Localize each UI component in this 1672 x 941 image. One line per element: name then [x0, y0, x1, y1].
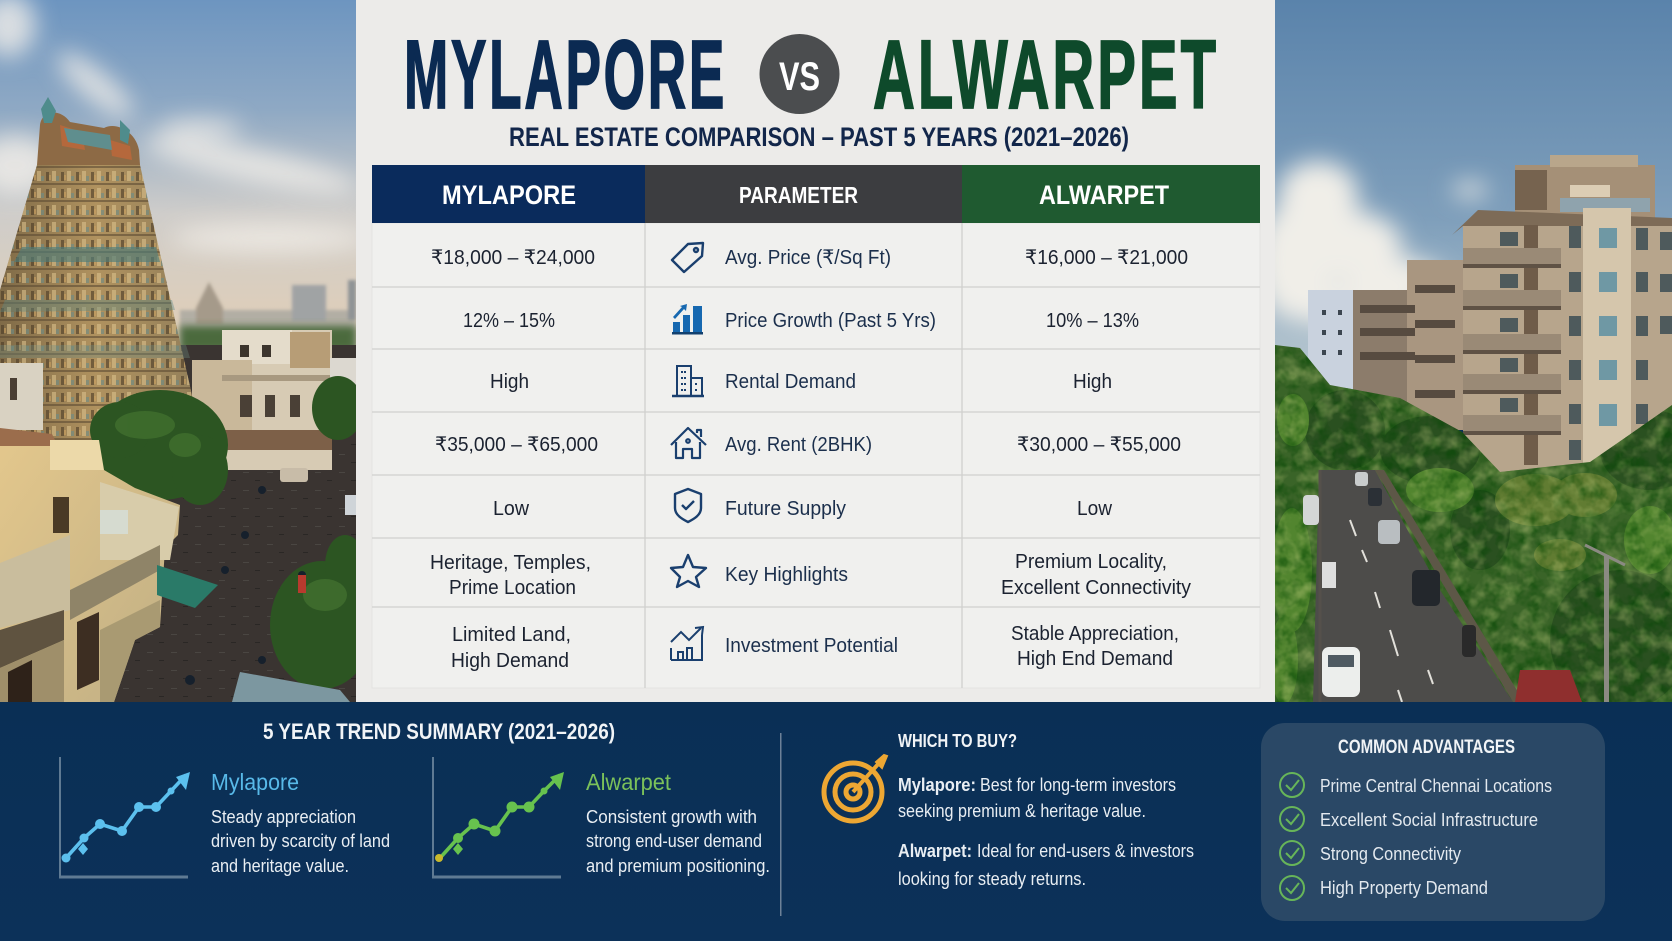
text: which to buy: Mylapore: — [898, 775, 976, 795]
icon: investment chart — [671, 627, 703, 660]
icon: buildings — [672, 366, 704, 396]
icon: bar growth — [672, 304, 703, 334]
row: key highlights: Key Highlights — [725, 564, 848, 586]
row: future supply: Future Supply — [725, 498, 846, 520]
chart: Alwarpet trend — [432, 757, 564, 877]
cars — [1303, 472, 1582, 702]
item: property demand: High Property Demand — [1320, 878, 1488, 898]
row: key highlights: Premium Locality, — [1015, 551, 1167, 573]
text: Alwarpet trend: and premium positioning. — [586, 856, 770, 876]
text: which to buy: Best for long-term investors — [980, 775, 1176, 795]
row: average price: ₹16,000 – ₹21,000 — [1025, 247, 1188, 269]
ground — [114, 345, 356, 702]
panel: bottom summary band — [0, 702, 1672, 941]
icon: price tag — [672, 243, 703, 272]
icon: shield — [675, 489, 701, 522]
table header: Parameter — [645, 165, 962, 223]
item: central locations: Prime Central Chennai Locations — [1320, 776, 1552, 796]
text: Mylapore trend — [211, 769, 390, 876]
icon: star — [671, 555, 706, 587]
row: average rent: ₹35,000 – ₹65,000 — [435, 434, 598, 456]
row: rental demand: High — [490, 371, 529, 393]
item: social infrastructure — [1280, 807, 1538, 831]
heading: Mylapore: MYLAPORE — [404, 20, 727, 129]
badge: VS — [760, 34, 840, 114]
row: average rent: ₹30,000 – ₹55,000 — [1017, 434, 1181, 456]
table header: Alwarpet — [962, 165, 1260, 223]
heading: Alwarpet: ALWARPET — [873, 20, 1219, 129]
row: future supply: Low — [1077, 498, 1113, 520]
text: Mylapore trend: and heritage value. — [211, 856, 349, 876]
trees — [90, 376, 374, 689]
row: rental demand: Rental Demand — [725, 371, 856, 393]
text: which to buy: seeking premium & heritage value. — [898, 801, 1146, 821]
badge: VS: VS — [779, 55, 820, 99]
chart: Mylapore trend — [59, 757, 190, 877]
row: investment potential: Stable Appreciation, — [1011, 623, 1179, 645]
row: price growth — [463, 304, 1139, 334]
row: rental demand: High — [1073, 371, 1112, 393]
main tower — [1515, 165, 1655, 218]
row: investment potential — [451, 623, 1179, 672]
table header: Alwarpet: ALWARPET — [1039, 180, 1169, 210]
row: price growth: 12% – 15% — [463, 310, 555, 332]
gopuram — [0, 165, 192, 460]
item: connectivity — [1280, 841, 1461, 865]
mid buildings — [192, 330, 356, 470]
row: rental demand — [490, 366, 1112, 396]
row: average rent — [435, 428, 1181, 458]
text: which to buy: Ideal for end-users & investors — [977, 841, 1194, 861]
item: central locations — [1280, 773, 1552, 797]
table header: Mylapore: MYLAPORE — [442, 180, 576, 210]
text: Alwarpet trend — [586, 769, 770, 876]
panel: comparison background — [356, 0, 1275, 702]
heritage building — [0, 440, 180, 702]
subtitle: REAL ESTATE COMPARISON – PAST 5 YEARS (2021–2026) — [509, 122, 1129, 152]
panel: common advantages: COMMON ADVANTAGES — [1338, 737, 1515, 758]
icon: house — [671, 428, 706, 458]
text: which to buy: looking for steady returns. — [898, 869, 1086, 889]
text: Mylapore trend: Mylapore — [211, 769, 299, 795]
text: which to buy — [898, 731, 1194, 889]
row: price growth: 10% – 13% — [1046, 310, 1139, 332]
road — [1313, 470, 1513, 702]
heading: trend summary: 5 YEAR TREND SUMMARY (2021–2026) — [263, 719, 615, 744]
text: Alwarpet trend: strong end-user demand — [586, 831, 762, 851]
panel: common advantages — [1261, 723, 1605, 921]
text: Alwarpet trend: Consistent growth with — [586, 807, 757, 827]
item: social infrastructure: Excellent Social Infrastructure — [1320, 810, 1538, 830]
row: average price: ₹18,000 – ₹24,000 — [431, 247, 595, 269]
text: which to buy: Alwarpet: — [898, 841, 972, 861]
row: average rent: Avg. Rent (2BHK) — [725, 434, 872, 456]
photo: Alwarpet apartments and road — [1257, 0, 1672, 710]
row: investment potential: Investment Potential — [725, 635, 898, 657]
table header: Mylapore — [372, 165, 645, 223]
trees — [1270, 340, 1672, 710]
row: key highlights: Excellent Connectivity — [1001, 577, 1191, 599]
row: key highlights — [430, 551, 1191, 599]
icon: target — [824, 755, 887, 821]
photo: Mylapore temple and street — [0, 0, 374, 702]
item: property demand — [1280, 876, 1488, 900]
text: Mylapore trend: driven by scarcity of land — [211, 831, 390, 851]
title — [404, 20, 1219, 129]
row: key highlights: Prime Location — [449, 577, 576, 599]
row: average price — [431, 243, 1188, 272]
street figures — [185, 486, 306, 685]
awning — [157, 565, 218, 608]
row: average price: Avg. Price (₹/Sq Ft) — [725, 247, 891, 269]
row: investment potential: High End Demand — [1017, 648, 1173, 670]
white block and background buildings — [1308, 290, 1353, 400]
row: investment potential: Limited Land, — [452, 624, 571, 646]
distant skyline — [180, 280, 356, 350]
row: price growth: Price Growth (Past 5 Yrs) — [725, 310, 936, 332]
row: future supply — [493, 489, 1113, 522]
row: future supply: Low — [493, 498, 530, 520]
row: key highlights: Heritage, Temples, — [430, 552, 591, 574]
row: investment potential: High Demand — [451, 650, 569, 672]
item: connectivity: Strong Connectivity — [1320, 844, 1461, 864]
comparison table — [372, 165, 1260, 688]
text: which to buy: WHICH TO BUY? — [898, 731, 1017, 751]
text: Mylapore trend: Steady appreciation — [211, 807, 356, 827]
table header: Parameter: PARAMETER — [739, 182, 858, 208]
text: Alwarpet trend: Alwarpet — [586, 769, 672, 795]
